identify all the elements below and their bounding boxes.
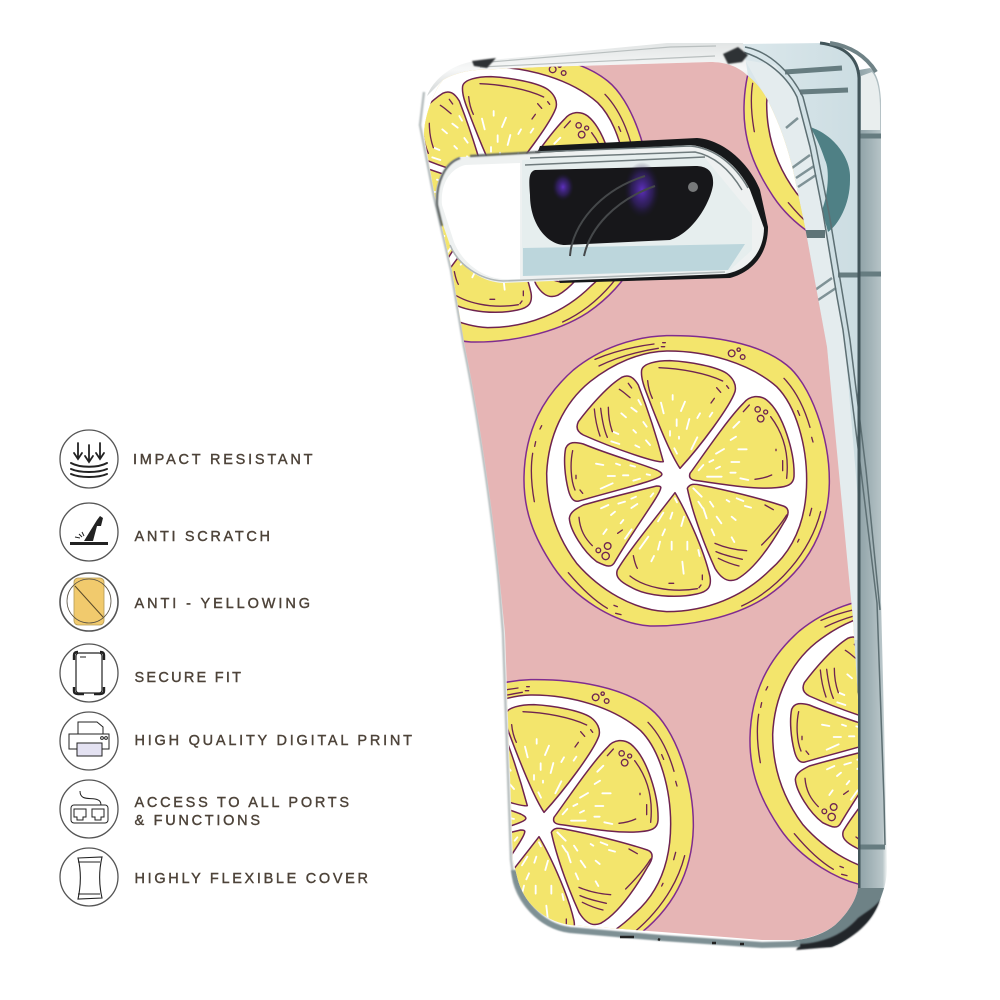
right side frame strip [858,68,887,905]
label second line: & FUNCTIONS [134,813,260,829]
rim gloss lines [525,146,748,190]
lower rim [450,245,725,281]
lemon slice: centre [524,336,829,626]
pink background [431,62,858,940]
label: ANTI - YELLOWING [134,596,310,612]
left case rim [420,92,565,930]
lens arcs [570,176,655,256]
feature: impact resistant [60,430,313,488]
label: IMPACT RESISTANT [133,452,313,468]
flash dot [688,182,698,192]
lower blue strip [523,244,745,276]
white window left [442,163,520,279]
icon: phone with bumpers [74,652,104,694]
icon: blade on surface [70,516,108,545]
label: ANTI SCRATCH [134,529,270,545]
icon: printer [69,722,109,756]
outer corner curve [830,43,876,72]
camera cut-out [436,138,768,283]
label: ACCESS TO ALL PORTS [134,795,349,811]
dark corner shade [796,900,880,950]
lemon slice: top left [424,66,642,343]
rim lines [480,46,716,67]
clear camera bump [436,145,764,283]
black shadow of camera bump [520,138,768,283]
clear side panel [745,60,858,640]
feature: high quality digital print [60,712,412,770]
icon: ports [71,791,108,823]
printed pink back with lemon pattern [424,62,858,940]
label: HIGH QUALITY DIGITAL PRINT [134,733,412,749]
panel stubs [786,118,836,300]
feature: anti yellowing [60,573,310,631]
bottom right corner [780,888,884,947]
lemon slice: top right [743,75,806,231]
lemon slice: bottom right [749,602,858,885]
label: HIGHLY FLEXIBLE COVER [134,871,368,887]
feature: access to all ports and functions [60,780,349,838]
feature: secure fit [60,644,241,702]
camera lens bar [529,166,713,245]
phone frame bands [785,68,885,847]
icon: impact arrows [71,443,107,477]
label: SECURE FIT [134,670,241,686]
dark rim spots [472,47,748,68]
lemon slice: bottom left [506,678,694,931]
upper strip highlight [861,72,880,130]
phone back seen through case [735,43,858,940]
phone and clear case body [420,43,887,950]
case edge curves [735,47,885,845]
bottom rim ports [620,937,744,944]
feature: anti scratch [60,503,270,561]
feature: highly flexible cover [60,848,368,906]
dark left rim [437,152,540,226]
lens glow small [552,173,574,201]
lens glow large [624,162,660,218]
teal camera crescent [810,127,850,232]
top case rim [427,43,748,96]
bottom rim [514,870,800,945]
phone frame dark line [820,43,859,890]
icon: bent cover [78,857,102,899]
blue phone area inside bump [522,152,752,276]
icon: yellow case crossed [67,578,111,625]
